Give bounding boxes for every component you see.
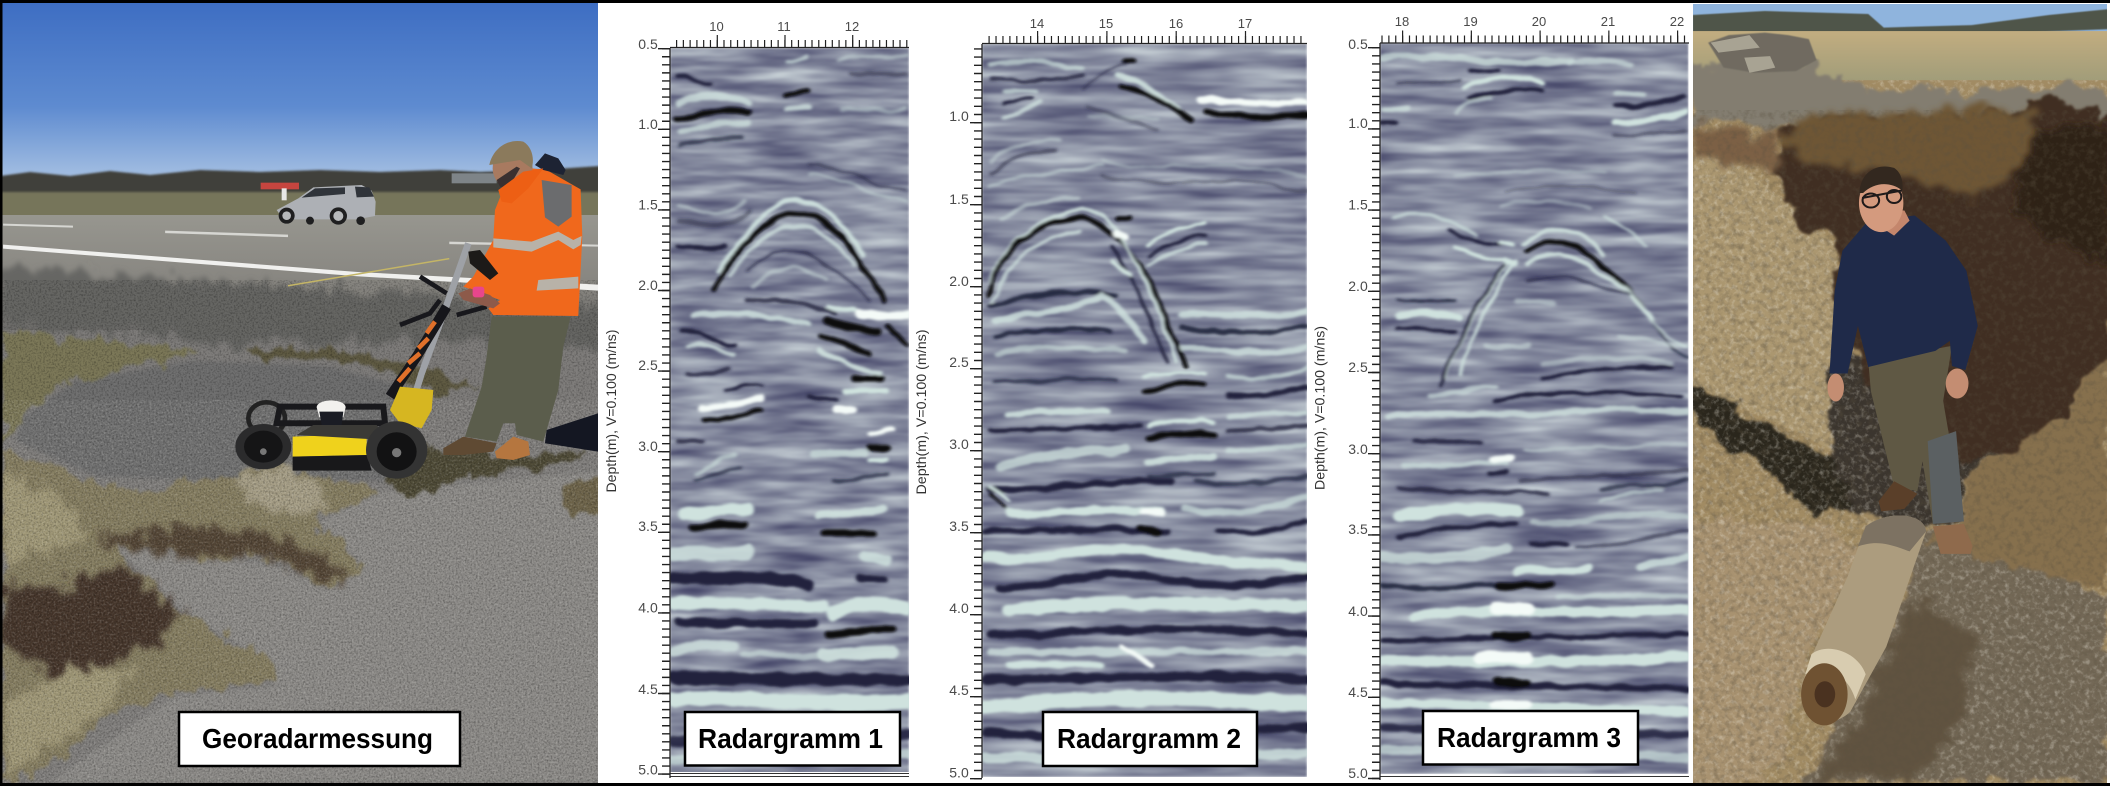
concrete slabs — [1708, 33, 1817, 73]
car windows — [302, 187, 374, 198]
radargram 2 depth labels: 1.5 — [949, 191, 969, 207]
car and horizon details — [235, 141, 598, 479]
right lower bank — [1925, 351, 2110, 592]
radargram 2 axes — [976, 37, 1307, 780]
white post — [282, 188, 287, 200]
grass large lower left — [3, 451, 384, 783]
man hair — [1859, 166, 1903, 193]
radargram 2 depth labels: 3.0 — [949, 436, 969, 452]
data logger — [468, 250, 498, 280]
bomb ring — [1805, 649, 1866, 699]
photo runway — [2, 215, 598, 330]
radargram 2 distance labels: 15 — [1099, 16, 1113, 31]
yellow battery box — [390, 387, 433, 428]
photo field — [0, 192, 600, 218]
radargram 3 depth labels — [1348, 36, 1368, 781]
panel: survey photo — [0, 0, 600, 786]
radargram 3 depth labels: 4.5 — [1348, 684, 1368, 700]
operator head — [493, 148, 533, 189]
man hand right — [1946, 368, 1968, 399]
operator trousers — [465, 317, 571, 442]
panel: radargram 2 — [914, 16, 1307, 780]
pit floor gravel — [1817, 341, 2023, 526]
gps dome — [317, 401, 346, 417]
radargram 1 depth labels: 1.0 — [638, 116, 658, 132]
operator hand — [458, 288, 500, 308]
dark moss band — [88, 526, 353, 584]
distant trees — [1693, 9, 2110, 41]
radargram 1 depth labels: 3.0 — [638, 438, 658, 454]
operator shoes — [443, 437, 497, 455]
radargram 3 distance labels: 18 — [1395, 14, 1409, 29]
radargram 3 depth labels: 2.0 — [1348, 278, 1368, 294]
operator hair — [489, 141, 533, 168]
bomb fuse end — [1801, 663, 1848, 725]
dry field — [1693, 31, 2110, 89]
pale slab — [1711, 35, 1775, 73]
radargram 1 depth labels: 0.5 — [638, 36, 658, 52]
radargram 3 depth labels: 3.5 — [1348, 521, 1368, 537]
man head — [1859, 174, 1903, 232]
radargram 2 distance labels: 14 — [1030, 16, 1044, 31]
bomb shade — [1858, 515, 1926, 551]
radargram 3 caption: Radargramm 3 — [1437, 722, 1621, 753]
cart frame column — [297, 425, 387, 440]
radargram 2 caption — [1043, 712, 1257, 766]
car hubs — [282, 211, 343, 221]
runway white line — [3, 245, 600, 291]
trench soil wall — [1778, 95, 2110, 461]
dark moss — [3, 566, 180, 674]
trench floor — [1806, 531, 2110, 782]
central dark soil — [1817, 597, 1977, 782]
radargram 1 depth labels: 3.5 — [638, 518, 658, 534]
radargram 3 depth labels: 4.0 — [1348, 603, 1368, 619]
radargram 3 depth labels: 1.5 — [1348, 196, 1368, 212]
soil grain — [1693, 110, 2107, 783]
trench right wall dark — [2013, 120, 2110, 266]
radargram 1 distance labels: 11 — [777, 19, 791, 34]
bomb body — [1801, 515, 1926, 722]
left lower soil — [1693, 521, 1863, 782]
car body — [277, 185, 376, 219]
radargram 3 axes — [1374, 36, 1689, 780]
radargram 2 axis title: Depth(m), V=0.100 (m/ns) — [914, 330, 929, 494]
radargram 3 depth labels: 1.0 — [1348, 115, 1368, 131]
radargram 3 depth labels: 0.5 — [1348, 36, 1368, 52]
operator shoe right — [495, 437, 530, 460]
man boot left — [1879, 481, 1917, 511]
man glasses — [1862, 190, 1902, 208]
radargram 1 image — [670, 48, 909, 778]
runway thin lines — [3, 224, 600, 247]
red sign — [261, 183, 299, 189]
radargram 3 distance labels: 21 — [1601, 14, 1615, 29]
man trousers — [1868, 346, 1964, 524]
runway yellow line — [288, 259, 449, 286]
radargram 3 bottom line — [1380, 776, 1689, 778]
base soil — [1693, 80, 2110, 786]
radargram 3 caption — [1423, 711, 1638, 764]
cart body yellow — [293, 434, 367, 457]
handle column — [390, 307, 447, 397]
trench upper soil band — [1778, 108, 2039, 198]
radargram 3 depth labels: 2.5 — [1348, 359, 1368, 375]
man trouser knee — [1928, 431, 1964, 524]
asphalt circle darker — [15, 361, 422, 481]
photo asphalt ground — [0, 330, 600, 786]
car wheels — [279, 207, 365, 225]
cart body black — [293, 455, 372, 471]
radargram 1 depth labels: 2.0 — [638, 277, 658, 293]
jacket reflective stripes — [493, 232, 582, 291]
gps base — [319, 412, 343, 425]
radargram 1 caption — [685, 712, 900, 766]
radargram 1 depth labels: 4.0 — [638, 600, 658, 616]
rubble band — [1693, 65, 2110, 130]
handle orange marks — [398, 322, 435, 382]
radargram 2 distance labels — [1030, 16, 1252, 31]
photo tree line — [0, 166, 600, 195]
cart frame — [277, 407, 385, 423]
operator jacket — [463, 168, 582, 316]
radargram 1 depth labels: 2.5 — [638, 357, 658, 373]
man neck — [1871, 211, 1910, 236]
radargram 2 depth labels: 2.0 — [949, 273, 969, 289]
rear wheel — [248, 402, 285, 434]
left upper bank — [1693, 120, 1780, 170]
lighter asphalt at lower right — [50, 471, 600, 782]
operator glasses and mask — [497, 167, 520, 188]
photo sky right — [1690, 3, 2110, 38]
left bank gravel — [1693, 150, 1837, 451]
radargram 2 caption: Radargramm 2 — [1057, 723, 1241, 754]
grass strip top left — [3, 331, 200, 446]
radargram 1 depth labels — [638, 36, 658, 778]
radargram 1 depth labels: 4.5 — [638, 681, 658, 697]
radargram 2 distance labels: 16 — [1169, 16, 1183, 31]
jacket shoulder patch — [542, 180, 572, 227]
pale grass clumps — [234, 464, 323, 516]
radargram 3 image — [1380, 43, 1688, 774]
gravel specks — [1693, 80, 2107, 783]
photo caption: Georadarmessung — [202, 723, 433, 754]
asphalt highlights — [2, 400, 598, 783]
radargram 3 distance labels: 20 — [1532, 14, 1546, 29]
man hand left — [1827, 373, 1844, 402]
panel: radargram 1 — [604, 19, 909, 778]
man boot right — [1933, 524, 1973, 554]
handle tube — [407, 243, 468, 422]
horizon building — [452, 173, 497, 183]
grass strip below cart — [384, 446, 584, 494]
radargram 1 axis title: Depth(m), V=0.100 (m/ns) — [604, 330, 619, 492]
grass patch right — [561, 476, 600, 517]
hood — [535, 153, 566, 175]
radargram 2 depth labels: 4.5 — [949, 682, 969, 698]
radargram 1 distance labels: 12 — [845, 19, 859, 34]
radargram 1 distance labels: 10 — [709, 19, 724, 34]
photo sky — [0, 0, 600, 178]
collar — [498, 168, 543, 203]
radargram 3 depth labels: 3.0 — [1348, 441, 1368, 457]
asphalt grain — [2, 280, 598, 783]
radargram 1 axes — [664, 41, 909, 778]
bomb fuse centre — [1815, 681, 1835, 707]
panel: excavated bomb photo — [1690, 3, 2110, 786]
radargram 2 depth labels — [949, 108, 969, 780]
radargram 2 depth labels: 4.0 — [949, 600, 969, 616]
radargram 2 depth labels: 3.5 — [949, 518, 969, 534]
pale grass clump left — [3, 476, 134, 772]
shadow on left bank — [1693, 383, 1848, 516]
radargram 1 bottom line — [670, 774, 909, 776]
panel: radargram 3 — [1312, 14, 1689, 781]
radargram 1 caption: Radargramm 1 — [698, 723, 883, 754]
radargram 1 depth labels: 1.5 — [638, 196, 658, 212]
photo caption — [179, 712, 460, 766]
cracked dark asphalt — [3, 266, 600, 346]
radargram 3 distance labels — [1395, 14, 1684, 29]
radargram 3 depth labels: 5.0 — [1348, 765, 1368, 781]
radargram 2 image — [982, 44, 1307, 777]
radargram 2 depth labels: 1.0 — [949, 108, 969, 124]
radargram 2 distance labels: 17 — [1238, 16, 1252, 31]
handlebar and display — [400, 277, 487, 325]
radargram 3 distance labels: 19 — [1463, 14, 1478, 29]
radargram 2 depth labels: 5.0 — [949, 764, 969, 780]
radargram 1 distance labels — [709, 19, 859, 34]
pink device — [473, 287, 484, 297]
radargram 2 depth labels: 2.5 — [949, 354, 969, 370]
radargram 3 distance labels: 22 — [1670, 14, 1684, 29]
front right wheel — [366, 421, 427, 479]
shadow of operator — [545, 413, 598, 452]
grass strips middle — [250, 346, 476, 394]
radargram 3 axis title: Depth(m), V=0.100 (m/ns) — [1312, 326, 1328, 490]
man hoodie — [1830, 216, 1978, 373]
front left wheel — [235, 424, 291, 469]
radargram 1 depth labels: 5.0 — [638, 762, 658, 778]
